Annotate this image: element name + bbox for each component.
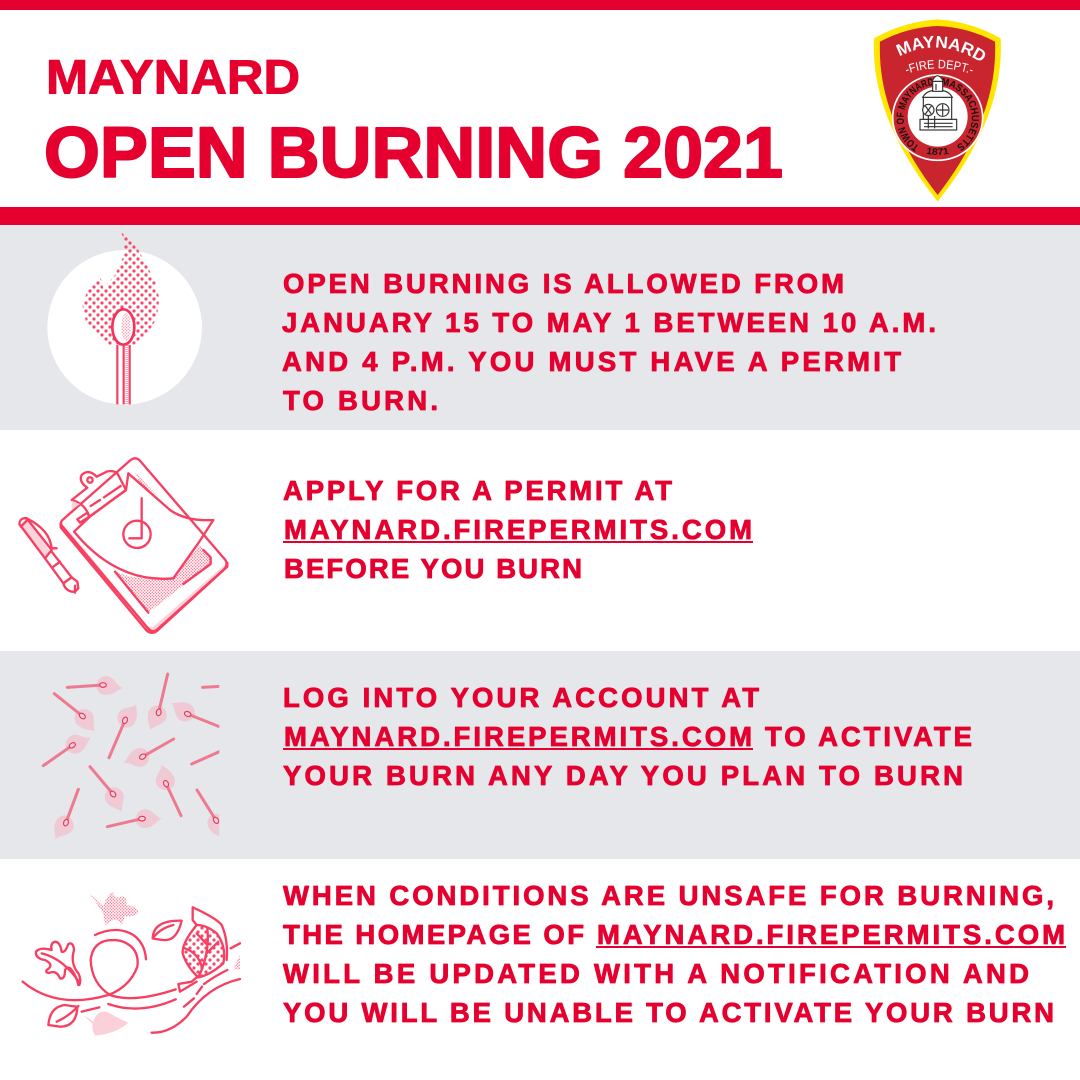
header bbox=[44, 52, 783, 193]
text: burning dates bbox=[282, 268, 936, 416]
text: unsafe conditions bbox=[283, 880, 1066, 1028]
text: burning dates: AND 4 P.M. YOU MUST HAVE A PERMIT bbox=[282, 346, 901, 377]
panel: unsafe conditions bbox=[23, 880, 1066, 1036]
text: unsafe conditions: WHEN CONDITIONS ARE UNSAFE FOR BURNING, bbox=[283, 880, 1054, 911]
fire department badge: -FIRE DEPT.- bbox=[906, 60, 973, 73]
fire department badge: TOWN OF MAYNARD bbox=[896, 78, 932, 152]
text: apply for permit: MAYNARD.FIREPERMITS.COM bbox=[284, 514, 752, 545]
text: log in: YOUR BURN ANY DAY YOU PLAN TO BURN bbox=[283, 760, 963, 791]
fire department badge: 1871 bbox=[926, 148, 949, 155]
text: unsafe conditions: THE HOMEPAGE OF bbox=[283, 919, 584, 950]
header divider bar bbox=[0, 207, 1080, 225]
text: log in: MAYNARD.FIREPERMITS.COM bbox=[284, 721, 752, 752]
panel: log in bbox=[0, 651, 1080, 859]
text: apply for permit: APPLY FOR A PERMIT AT bbox=[283, 475, 672, 506]
fire department badge: MAYNARD bbox=[896, 36, 986, 60]
text: unsafe conditions: MAYNARD.FIREPERMITS.COM bbox=[597, 919, 1065, 950]
text: log in: LOG INTO YOUR ACCOUNT AT bbox=[283, 682, 759, 713]
fire department badge bbox=[874, 19, 1001, 202]
icon: wind and leaves bbox=[23, 892, 240, 1036]
icon: scattered matches bbox=[43, 674, 234, 844]
icon: lit match bbox=[47, 230, 202, 405]
text: apply for permit bbox=[283, 475, 753, 584]
text: burning dates: JANUARY 15 TO MAY 1 BETWEEN 10 A.M. bbox=[282, 307, 936, 338]
icon: clipboard and pen bbox=[19, 458, 227, 633]
text: log in: TO ACTIVATE bbox=[765, 721, 972, 752]
text: unsafe conditions: YOU WILL BE UNABLE TO ACTIVATE YOUR BURN bbox=[283, 997, 1054, 1028]
text: burning dates: OPEN BURNING IS ALLOWED FROM bbox=[283, 268, 844, 299]
text: burning dates: TO BURN. bbox=[283, 385, 438, 416]
heading: Maynard: MAYNARD bbox=[46, 52, 300, 104]
text: apply for permit: BEFORE YOU BURN bbox=[284, 553, 582, 584]
panel: apply for permit bbox=[19, 458, 753, 633]
title: Open Burning 2021: OPEN BURNING 2021 bbox=[44, 114, 783, 193]
panel: burning dates bbox=[0, 225, 1080, 430]
top red bar bbox=[0, 0, 1080, 10]
fire department badge: MASSACHUSETTS bbox=[942, 78, 979, 151]
text: unsafe conditions: WILL BE UPDATED WITH A NOTIFICATION AND bbox=[283, 958, 1029, 989]
text: log in bbox=[283, 682, 972, 791]
